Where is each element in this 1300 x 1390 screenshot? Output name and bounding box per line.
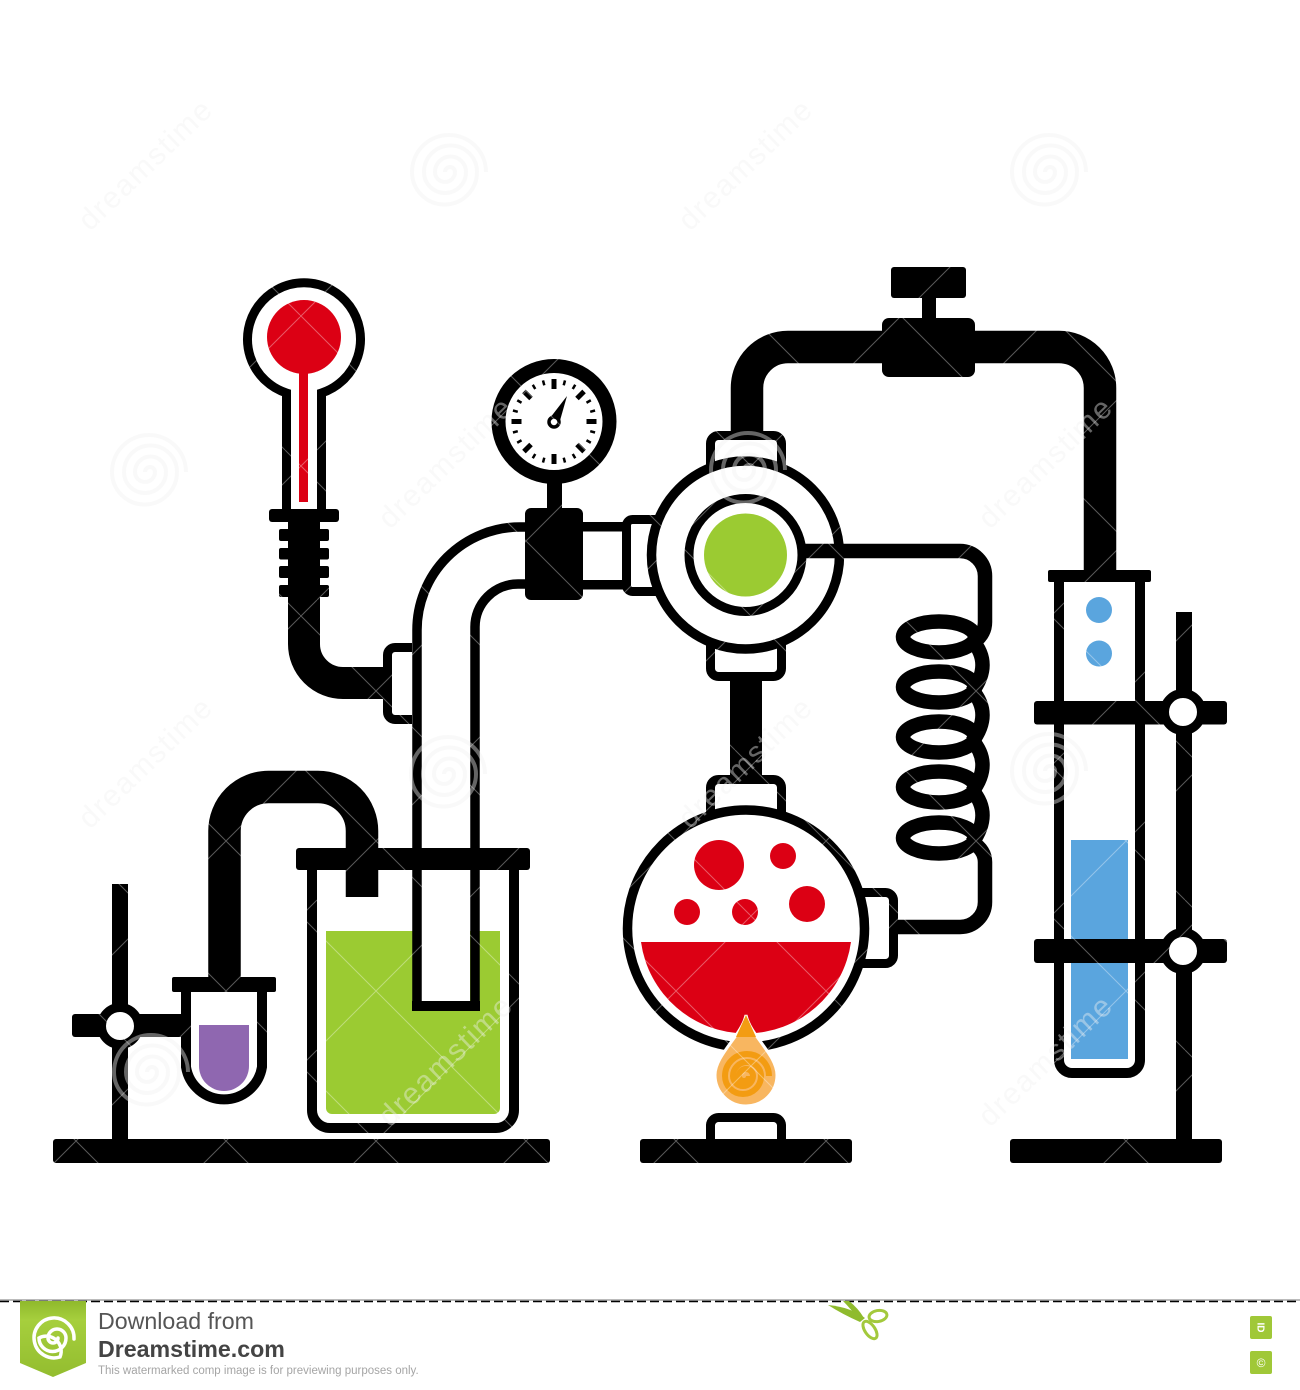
condenser coil [804, 551, 985, 927]
vessel bottom flange [710, 626, 782, 676]
main vertical glass tube dipping in beaker [412, 527, 530, 1006]
beaker with green liquid [312, 860, 514, 1128]
connector block [525, 508, 583, 600]
footer note: This watermarked comp image is for previewing purposes only. [98, 1365, 419, 1377]
left retort stand with clamp [72, 884, 184, 1140]
round flask with red liquid and bubbles [628, 810, 864, 1047]
icon: copyright badge: © [1257, 1356, 1266, 1370]
burner flame [715, 1015, 777, 1106]
icon: copyright badge [1250, 1351, 1272, 1374]
top black pipe with valve [747, 267, 1100, 575]
flask side flange [830, 892, 894, 964]
pipe between vessel and flask [730, 670, 762, 780]
burner on base plate [640, 1117, 852, 1163]
icon: scissors [828, 1301, 888, 1341]
spherical vessel with green core [652, 461, 840, 649]
footer heading: Download from: Download from [98, 1308, 254, 1334]
watermark text: dreamstime [972, 990, 1119, 1133]
short pipe between block and vessel [580, 522, 626, 590]
watermark text: dreamstime [372, 392, 519, 535]
footer heading: Dreamstime.com: Dreamstime.com [98, 1336, 285, 1362]
right test tube with blue liquid [1048, 570, 1151, 1073]
right stand base and rod [1010, 612, 1222, 1163]
vessel top flange [710, 436, 782, 486]
thermometer [248, 283, 360, 510]
watermark text: dreamstime [972, 392, 1119, 535]
arched black pipe from small tube to beaker [224, 787, 362, 985]
footer ribbon logo [20, 1301, 86, 1377]
pressure gauge [498, 366, 610, 512]
small test tube with purple liquid [186, 985, 262, 1099]
vessel left flange [626, 520, 676, 592]
watermark text: dreamstime [672, 94, 819, 237]
right stand clamps [1034, 694, 1227, 970]
footer dashed cut line [0, 1300, 1300, 1302]
watermark text [72, 94, 1119, 1133]
watermark text: dreamstime [372, 990, 519, 1133]
beaker rim [296, 848, 530, 870]
left pipe flange [388, 648, 412, 720]
icon: ID badge: ID [1254, 1322, 1266, 1332]
base: left bench plate [53, 1139, 550, 1163]
watermark text: dreamstime [672, 692, 819, 835]
watermark spirals [112, 135, 1086, 1104]
thermometer stopper and bent pipe [269, 509, 390, 683]
icon: ID badge [1250, 1316, 1272, 1339]
watermark text: dreamstime [72, 692, 219, 835]
small tube rim [172, 977, 276, 992]
watermark text: dreamstime [72, 94, 219, 237]
flask top flange [710, 780, 782, 840]
